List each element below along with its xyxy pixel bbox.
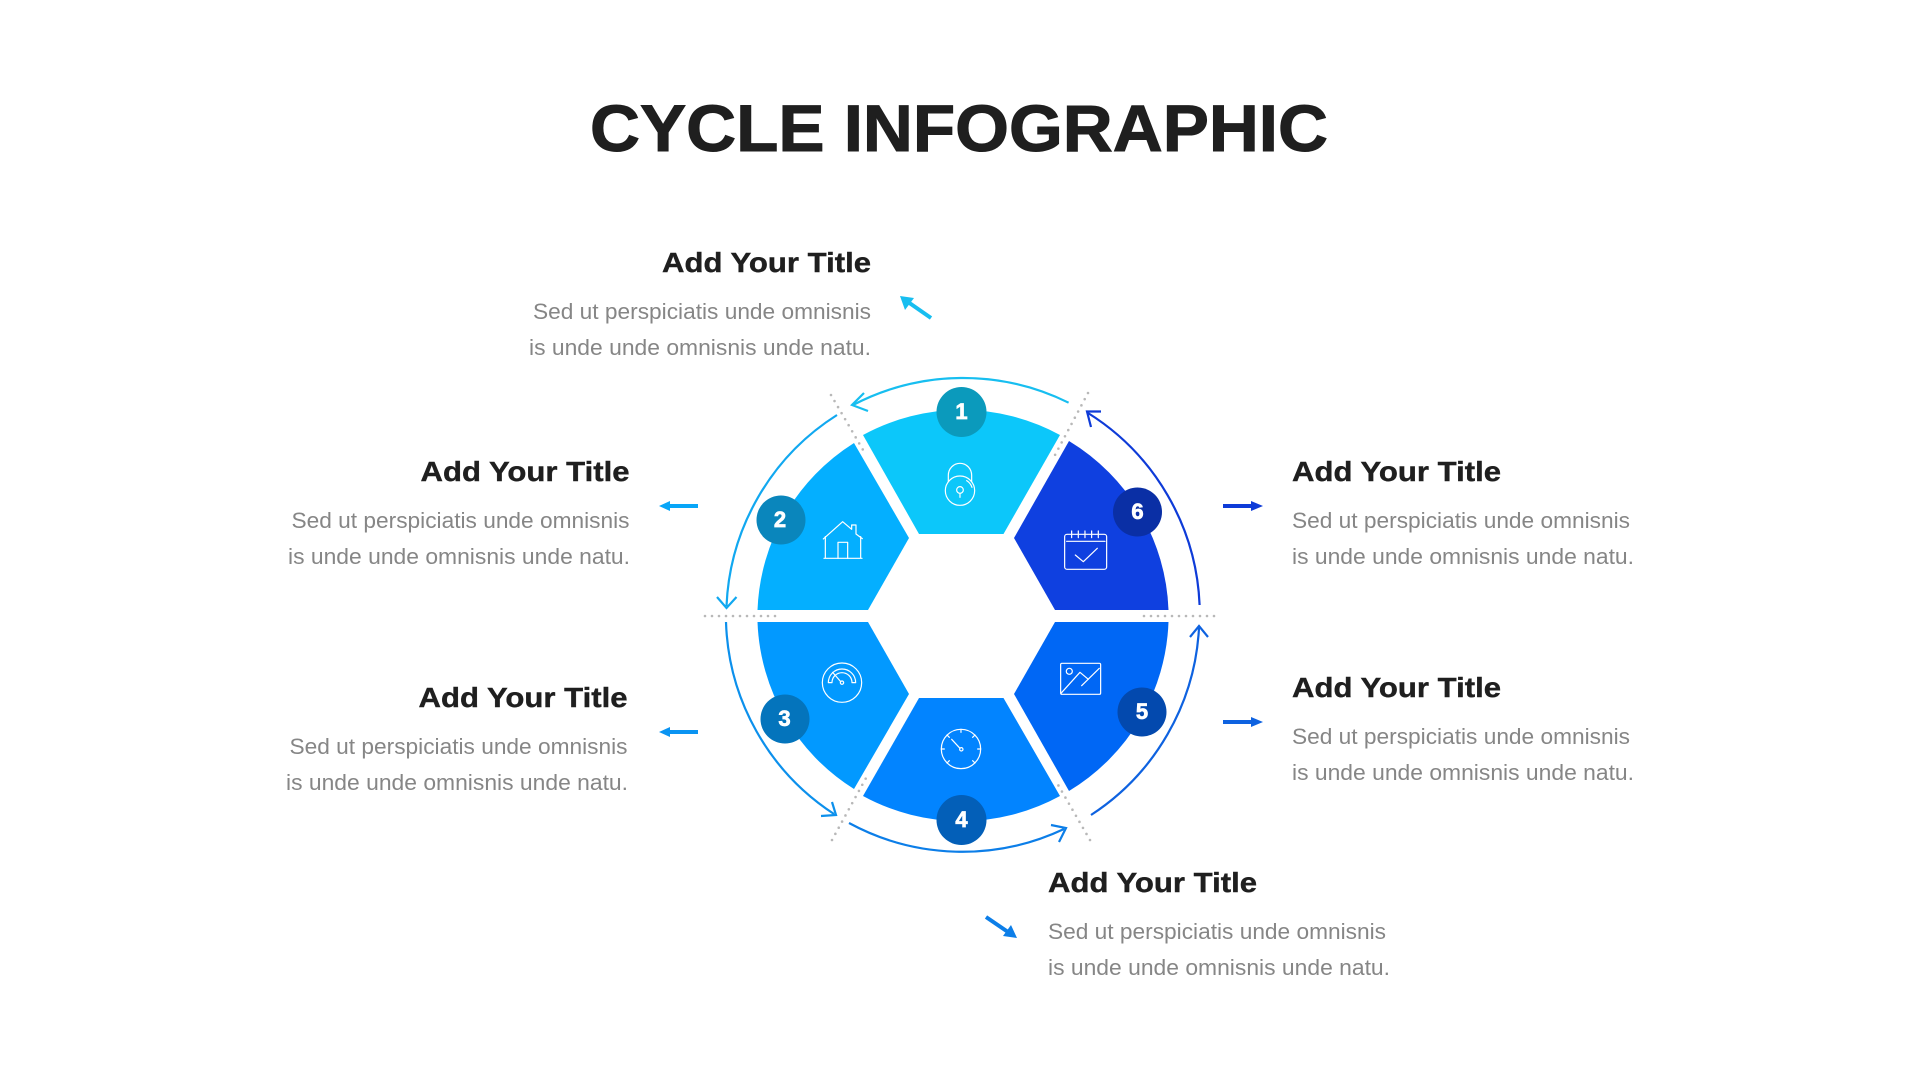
cycle arrow 6 bbox=[1087, 412, 1200, 605]
icon: speedometer bbox=[941, 729, 981, 769]
title: CYCLE INFOGRAPHIC bbox=[590, 91, 1328, 165]
text block 4 bbox=[1048, 867, 1390, 980]
text block 4: Sed ut perspiciatis unde omnisnis bbox=[1048, 919, 1386, 944]
number badge 3: 3 bbox=[778, 706, 791, 731]
pointer arrow 4 bbox=[986, 917, 1017, 938]
icon: gauge bbox=[822, 663, 862, 702]
text block 1 bbox=[529, 247, 871, 360]
text block 6 bbox=[1292, 456, 1634, 569]
text block 1: is unde unde omnisnis unde natu. bbox=[529, 335, 871, 360]
text block 3: Sed ut perspiciatis unde omnisnis bbox=[290, 734, 628, 759]
number badge 6 bbox=[1113, 488, 1162, 536]
number badge 1: 1 bbox=[955, 399, 968, 424]
segment 3 bbox=[758, 622, 909, 789]
text block 4: is unde unde omnisnis unde natu. bbox=[1048, 955, 1390, 980]
text block 3: Add Your Title bbox=[418, 682, 628, 713]
number badge 5: 5 bbox=[1136, 699, 1148, 724]
text block 5 bbox=[1292, 672, 1634, 785]
number badge 5 bbox=[1118, 688, 1166, 736]
segment 6 bbox=[1014, 441, 1168, 610]
icon: image bbox=[1061, 663, 1101, 694]
cycle arrow 4 bbox=[849, 823, 1066, 852]
icon: calendar bbox=[1065, 531, 1107, 569]
text block 5: Add Your Title bbox=[1292, 672, 1501, 703]
text block 3: is unde unde omnisnis unde natu. bbox=[286, 770, 628, 795]
text block 2: Sed ut perspiciatis unde omnisnis bbox=[292, 508, 630, 533]
pointer arrow 2 bbox=[659, 501, 698, 511]
dotted separators bbox=[705, 393, 1215, 840]
segment 4 bbox=[863, 698, 1060, 821]
number badge 6: 6 bbox=[1131, 499, 1144, 524]
number badge 2: 2 bbox=[774, 507, 786, 532]
number badge 3 bbox=[760, 694, 810, 744]
icon: lock bbox=[945, 463, 975, 505]
text block 5: Sed ut perspiciatis unde omnisnis bbox=[1292, 724, 1630, 749]
cycle arrow 1 bbox=[852, 378, 1069, 411]
text block 1: Add Your Title bbox=[662, 247, 871, 278]
cycle arrow 2 bbox=[717, 415, 837, 608]
number badge 4 bbox=[936, 795, 986, 845]
text block 5: is unde unde omnisnis unde natu. bbox=[1292, 760, 1634, 785]
pointer arrow 3 bbox=[659, 727, 698, 737]
cycle arrow 5 bbox=[1091, 626, 1208, 815]
cycle arrow 3 bbox=[726, 622, 836, 816]
text block 2 bbox=[288, 456, 630, 569]
text block 3 bbox=[286, 682, 628, 795]
text block 2: is unde unde omnisnis unde natu. bbox=[288, 544, 630, 569]
text block 6: is unde unde omnisnis unde natu. bbox=[1292, 544, 1634, 569]
number badge 1 bbox=[936, 387, 986, 437]
pointer arrow 5 bbox=[1223, 717, 1263, 727]
text block 1: Sed ut perspiciatis unde omnisnis bbox=[533, 299, 871, 324]
segment 1 bbox=[863, 410, 1060, 534]
pointer arrow 6 bbox=[1223, 501, 1263, 511]
icon: house bbox=[823, 522, 862, 558]
text block 2: Add Your Title bbox=[420, 456, 630, 487]
number badge 4: 4 bbox=[955, 807, 968, 832]
segment 2 bbox=[758, 443, 909, 610]
pointer arrow 1 bbox=[900, 296, 931, 318]
text block 4: Add Your Title bbox=[1048, 867, 1257, 898]
number badge 2 bbox=[756, 496, 806, 544]
text block 6: Sed ut perspiciatis unde omnisnis bbox=[1292, 508, 1630, 533]
segment 5 bbox=[1014, 622, 1168, 791]
text block 6: Add Your Title bbox=[1292, 456, 1501, 487]
